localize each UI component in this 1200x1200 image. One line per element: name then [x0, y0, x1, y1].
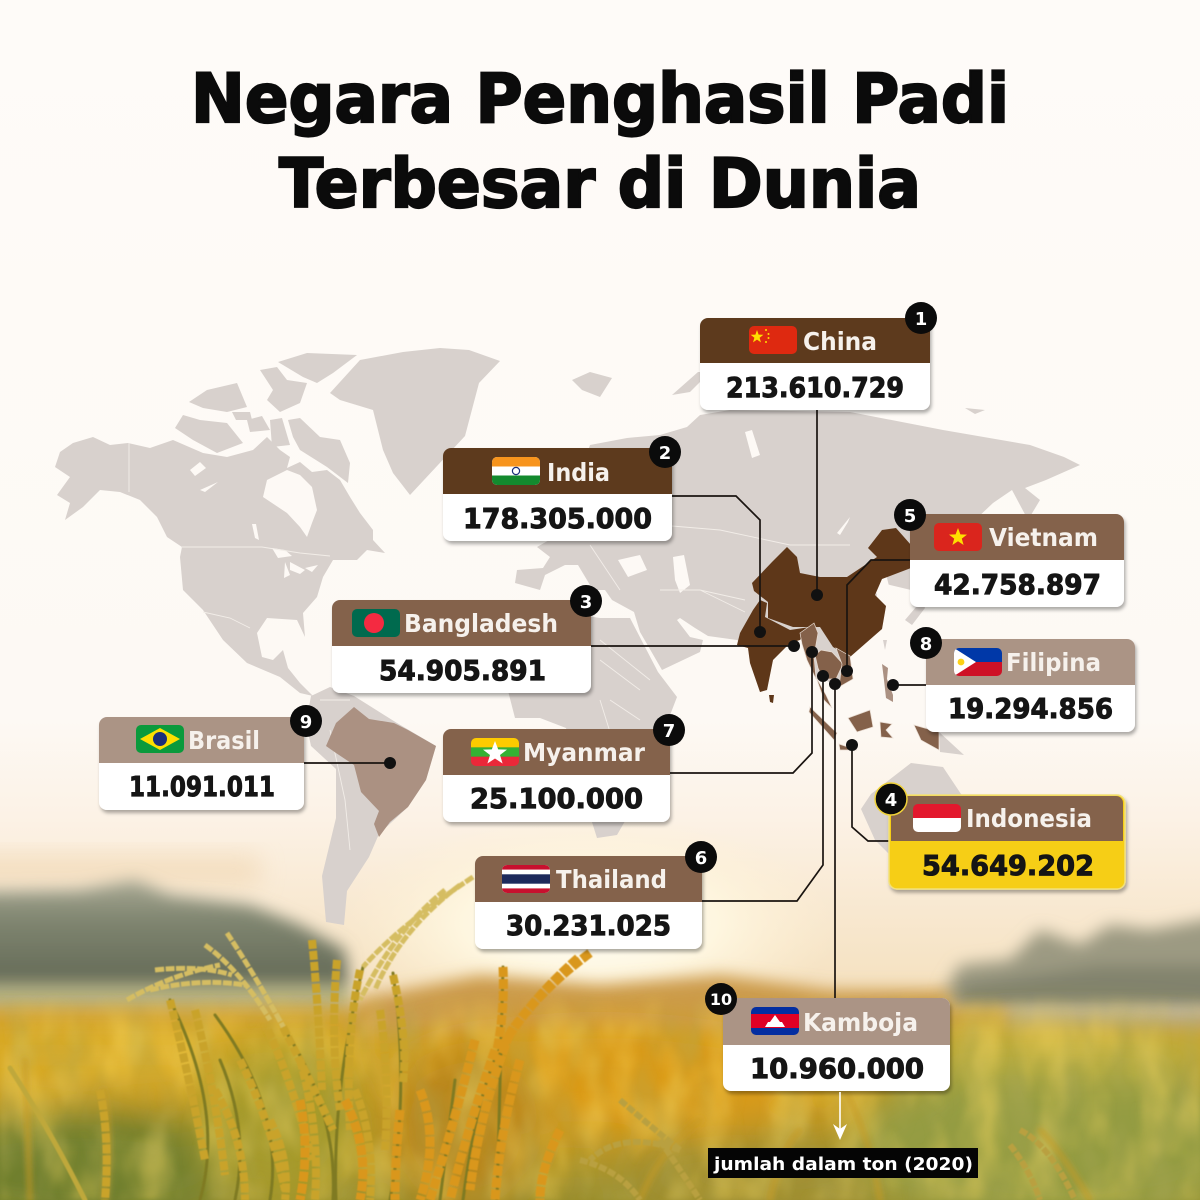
badge: 9: 9 — [300, 712, 312, 733]
Australia and New Guinea — [861, 732, 1010, 880]
world map — [55, 348, 1080, 925]
card: Indonesia — [875, 783, 1125, 889]
badge: 8: 8 — [920, 634, 932, 655]
card: Vietnam — [894, 499, 1124, 607]
Southeast Asia — [800, 623, 939, 750]
card: Thailand: Thailand — [556, 865, 667, 894]
flag: Cambodia — [751, 1007, 799, 1035]
card: Filipina — [910, 627, 1135, 732]
North America — [55, 437, 385, 696]
card: Brasil: Brasil — [188, 726, 260, 755]
flag: Philippines — [954, 648, 1002, 676]
card: India — [443, 436, 681, 541]
badge: 4 — [875, 783, 907, 815]
unit note: jumlah dalam ton (2020) — [713, 1154, 973, 1175]
connector lines — [304, 410, 926, 998]
badge: 7: 7 — [663, 721, 675, 742]
card: Vietnam: 42.758.897 — [934, 568, 1101, 601]
card: Filipina: 19.294.856 — [948, 692, 1113, 725]
card: China — [700, 302, 937, 410]
title — [191, 60, 1009, 224]
card: Kamboja: Kamboja — [803, 1008, 918, 1037]
rice stalks in foreground — [10, 877, 1090, 1200]
card: India: 178.305.000 — [463, 502, 652, 535]
card: Bangladesh: 54.905.891 — [379, 654, 546, 687]
South America — [306, 687, 436, 925]
India — [737, 600, 810, 703]
card: Myanmar: Myanmar — [523, 738, 646, 767]
Greenland — [330, 348, 500, 495]
title: Negara Penghasil Padi — [191, 60, 1009, 139]
badge: 3: 3 — [580, 592, 592, 613]
badge: 9 — [290, 705, 322, 737]
card: Kamboja: 10.960.000 — [750, 1052, 924, 1085]
card: Filipina: Filipina — [1006, 648, 1101, 677]
card: China: 213.610.729 — [726, 371, 904, 404]
card: Brasil: 11.091.011 — [129, 770, 275, 803]
unit note — [708, 1148, 978, 1178]
Japan — [905, 600, 925, 625]
background: sunset rice field — [0, 768, 1200, 1200]
card: Indonesia: 54.649.202 — [922, 849, 1094, 882]
card: Brasil — [99, 705, 322, 810]
badge: 3 — [570, 585, 602, 617]
Svalbard and Arctic Russia islands — [572, 372, 985, 414]
badge: 10 — [705, 983, 737, 1015]
card: Myanmar: 25.100.000 — [470, 782, 643, 815]
badge: 6 — [685, 841, 717, 873]
card: Bangladesh: Bangladesh — [404, 609, 558, 638]
badge: 5: 5 — [904, 506, 916, 527]
flag: Brazil — [136, 725, 184, 753]
flag: Indonesia — [913, 804, 961, 832]
card: Thailand — [475, 841, 717, 949]
badge: 2: 2 — [659, 443, 671, 464]
badge: 5 — [894, 499, 926, 531]
card: Myanmar — [443, 714, 685, 822]
Arctic islands — [288, 418, 350, 483]
Brazil — [326, 707, 436, 837]
badge: 6: 6 — [695, 848, 707, 869]
flag: Vietnam — [934, 523, 982, 551]
flag: India — [492, 457, 540, 485]
arrow: to unit note — [833, 1092, 847, 1140]
China — [752, 528, 911, 657]
card: Indonesia: Indonesia — [966, 804, 1092, 833]
seas and lakes — [190, 430, 890, 596]
flag: Myanmar — [471, 738, 519, 766]
badge: 4: 4 — [885, 790, 897, 811]
card: India: India — [547, 458, 610, 487]
card: China: China — [803, 327, 877, 356]
Eurasia — [515, 410, 1080, 692]
card: Bangladesh — [332, 585, 602, 693]
card: Thailand: 30.231.025 — [506, 909, 671, 942]
badge: 1: 1 — [915, 309, 927, 330]
Africa — [500, 612, 677, 838]
flag: Thailand — [502, 865, 550, 893]
title: Terbesar di Dunia — [279, 145, 921, 224]
badge: 1 — [905, 302, 937, 334]
badge: 8 — [910, 627, 942, 659]
badge: 7 — [653, 714, 685, 746]
flag: China — [749, 326, 797, 354]
badge: 2 — [649, 436, 681, 468]
badge: 10: 10 — [710, 990, 732, 1009]
card: Kamboja — [705, 983, 950, 1091]
card: Vietnam: Vietnam — [989, 523, 1098, 552]
flag: Bangladesh — [352, 609, 400, 637]
Philippines — [882, 664, 893, 702]
